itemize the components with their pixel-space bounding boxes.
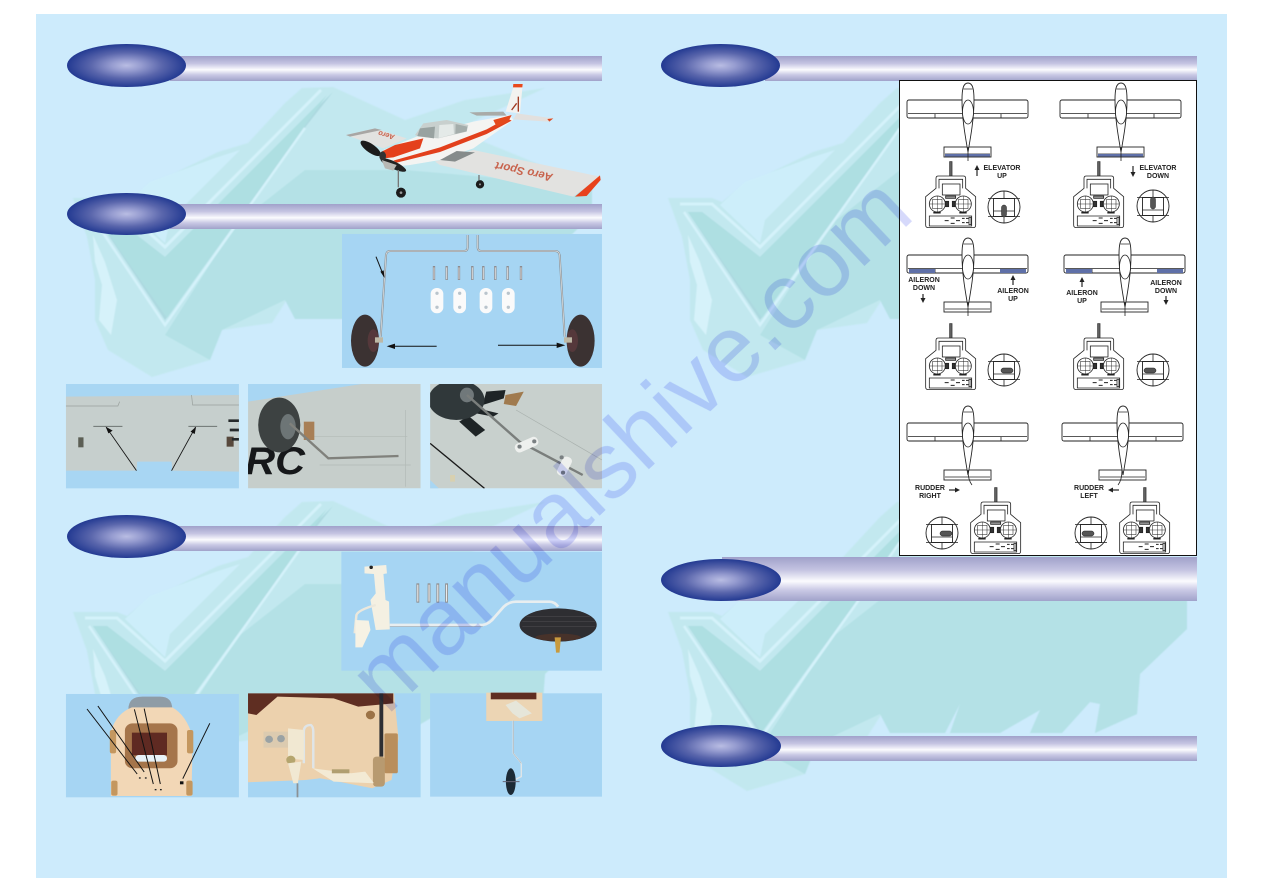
diagram: aileron right stick: UP [1077,298,1087,305]
photo: tail wheel kit [341,552,602,671]
diagram: aileron left stick: AILERON [908,277,940,284]
diagram: rudder right [907,406,1028,554]
diagram: aileron right stick: DOWN [1155,288,1177,295]
photo: main gear installed: RC [245,438,306,483]
photo: airplane: Aero [377,129,396,142]
photo: main gear installed [245,384,421,488]
photo: gear straps fitted [428,380,602,488]
header bar 5 tall [661,557,1197,601]
diagram: aileron left stick: UP [1008,296,1018,303]
photo: main landing gear kit [342,234,602,368]
diagram: rudder right: RIGHT [919,493,942,500]
diagram: aileron left stick [907,238,1029,390]
background logo watermarks [73,87,1187,791]
diagram: aileron right stick: AILERON [1066,290,1098,297]
header bar 1 [67,44,602,87]
diagram: aileron left stick: AILERON [997,288,1029,295]
photo: airplane: Aero Sport [493,159,555,183]
diagram: rudder right: RUDDER [915,485,945,492]
header bar 3 [67,515,602,558]
diagram: rudder left: RUDDER [1074,485,1104,492]
arrows [376,257,565,349]
diagram: rudder left: LEFT [1080,493,1098,500]
diagram: elevator down: DOWN [1147,173,1169,180]
photo: tail wheel bracket close-up [248,693,421,797]
gear wire [381,235,565,337]
diagram: elevator up [907,83,1028,228]
header bar 4 [661,44,1197,87]
diagram: elevator up: ELEVATOR [984,165,1020,172]
photo: firewall front [66,694,239,797]
diagram: elevator down: ELEVATOR [1140,165,1176,172]
photo: wing underside slots [66,384,239,488]
control surface diagram panel [900,80,1196,556]
diagram: aileron right stick [1064,238,1185,390]
diagram: rudder left [1062,406,1183,554]
photo: tail wheel installed [430,693,602,797]
watermark text: manualshive.com [329,155,930,731]
diagram: elevator up: UP [997,173,1007,180]
header bar 6 [661,725,1197,767]
diagram: elevator down [1060,83,1181,228]
photo: airplane [346,84,601,198]
diagram: aileron left stick: DOWN [913,285,935,292]
diagram: aileron right stick: AILERON [1150,280,1182,287]
header bar 2 [67,193,602,235]
